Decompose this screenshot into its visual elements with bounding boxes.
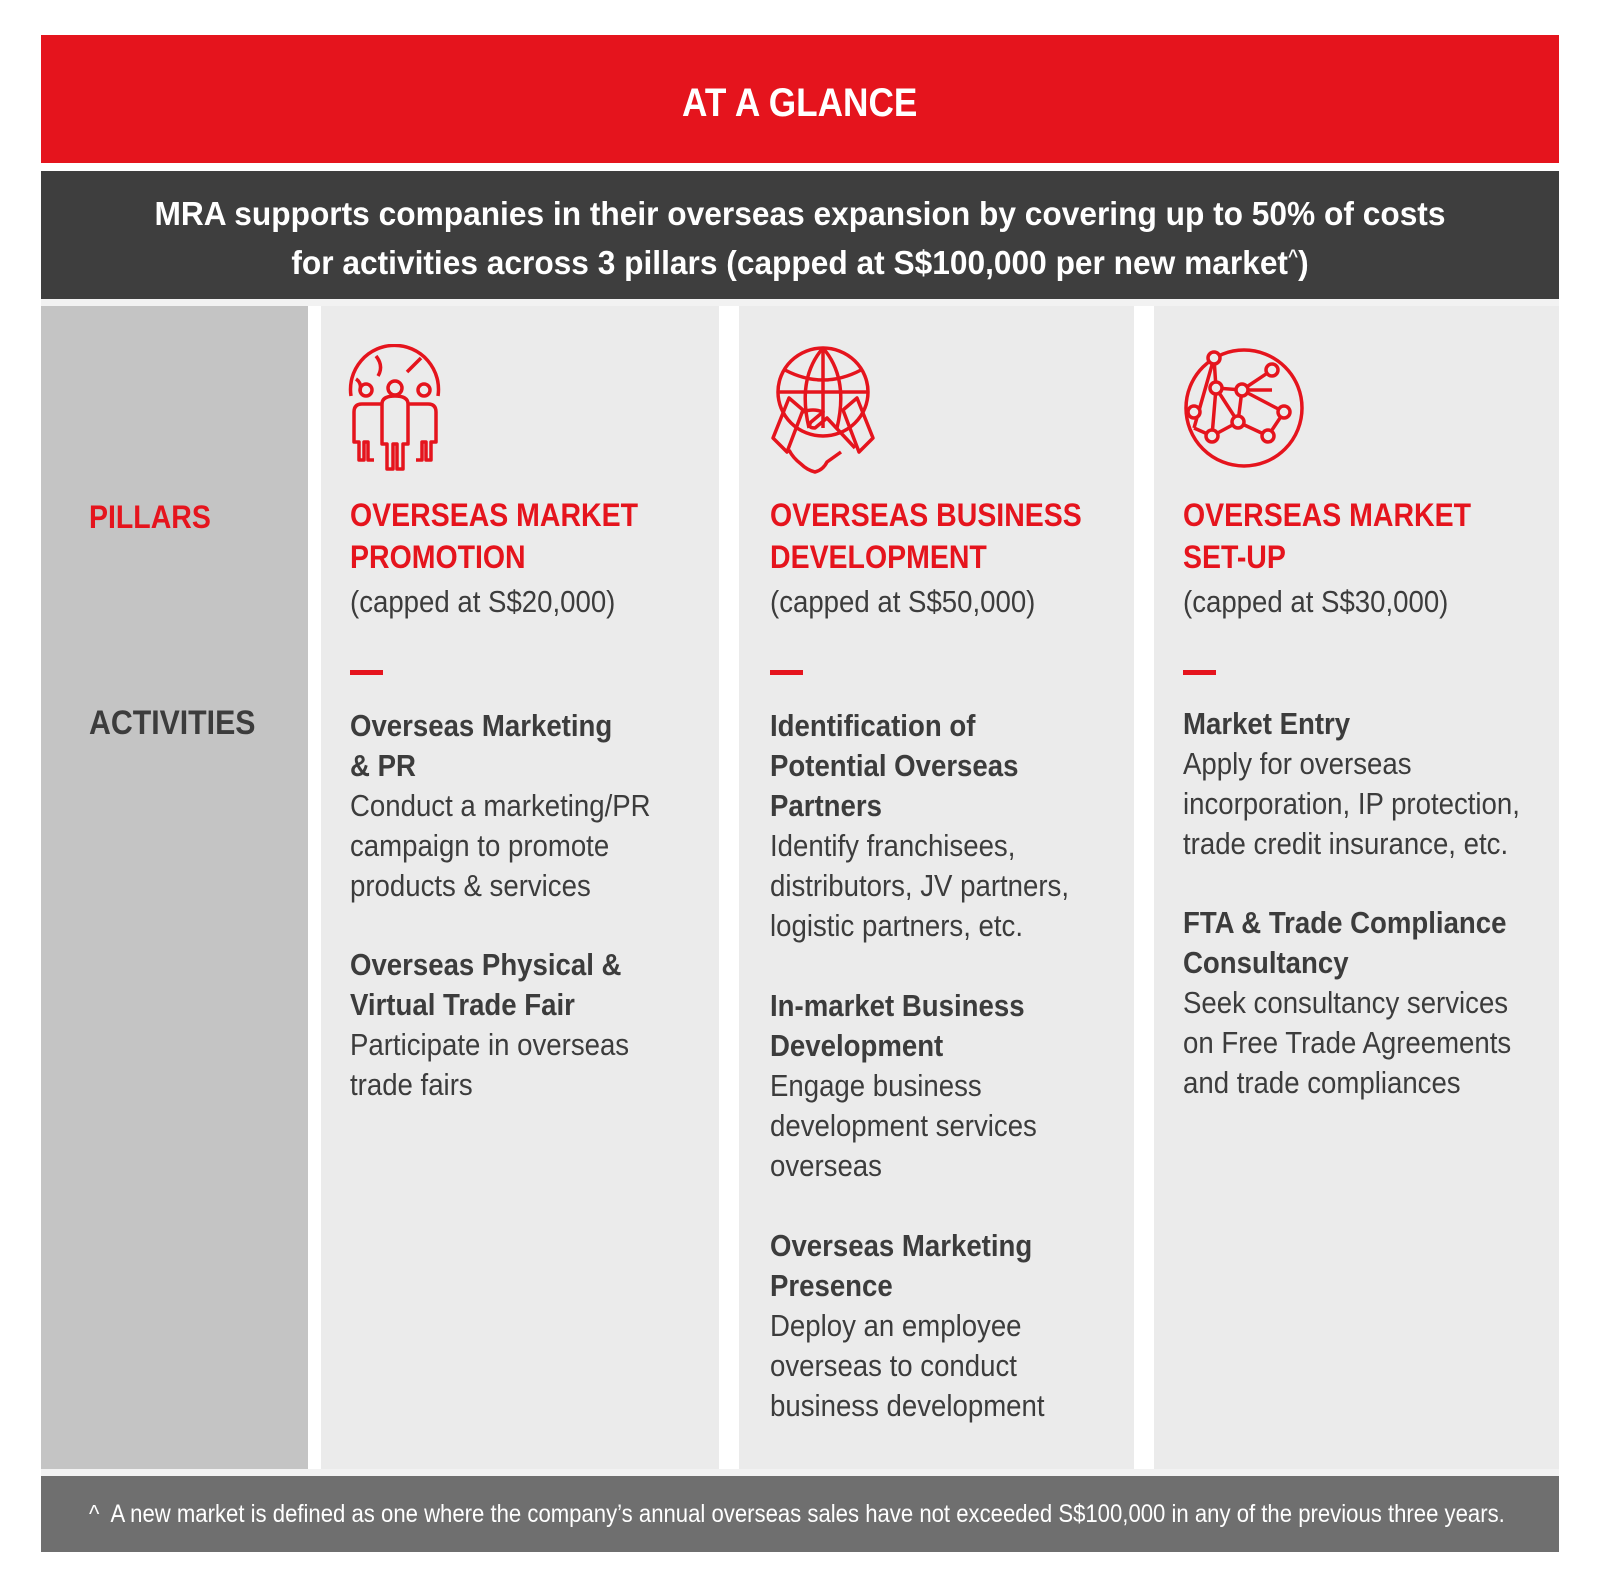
activity: partners: Identify franchisees, — [770, 828, 1015, 863]
activity: marketing & PR: & PR — [350, 748, 416, 783]
activity: market entry: incorporation, IP protection, — [1183, 786, 1520, 821]
activity: partners: Identification of — [770, 708, 975, 743]
activity: marketing presence: overseas to conduct — [770, 1348, 1017, 1383]
activity: partners: Partners — [770, 788, 882, 823]
pillar heading: OVERSEAS MARKET — [350, 497, 638, 533]
activity: fta consultancy: Seek consultancy services — [1183, 985, 1508, 1020]
activity: partners: Potential Overseas — [770, 748, 1018, 783]
activity: marketing presence: Presence — [770, 1268, 893, 1303]
activity: fta consultancy: FTA & Trade Compliance — [1183, 905, 1506, 940]
pillar heading — [1183, 497, 1471, 575]
activity: in-market bd: In-market Business — [770, 988, 1025, 1023]
activity: fta consultancy — [1183, 905, 1511, 1100]
activity: marketing & PR: campaign to promote — [350, 828, 609, 863]
activity: partners: logistic partners, etc. — [770, 908, 1023, 943]
activity: market entry: trade credit insurance, etc. — [1183, 826, 1508, 861]
pillar heading: SET-UP — [1183, 539, 1286, 575]
label: activities: ACTIVITIES — [89, 704, 255, 742]
activity: partners: distributors, JV partners, — [770, 868, 1069, 903]
title bar — [41, 35, 1559, 163]
activity: marketing & PR — [350, 708, 651, 903]
activity: marketing & PR: products & services — [350, 868, 591, 903]
pillar heading: OVERSEAS BUSINESS — [770, 497, 1082, 533]
activity: market entry: Market Entry — [1183, 706, 1350, 741]
cap amount: (capped at S$30,000) — [1183, 584, 1448, 619]
activity: in-market bd — [770, 988, 1037, 1183]
activity: marketing & PR: Overseas Marketing — [350, 708, 612, 743]
panel: overseas market promotion — [321, 306, 719, 1469]
cap amount: (capped at S$50,000) — [770, 584, 1035, 619]
activity: trade fair — [350, 947, 629, 1102]
activity: in-market bd: Development — [770, 1028, 943, 1063]
activity: market entry: Apply for overseas — [1183, 746, 1411, 781]
subtitle band: MRA supports companies in their overseas expansion by covering up to 50% of costs — [155, 195, 1445, 232]
subtitle band: for activities across 3 pillars (capped at S$100,000 per new market^) — [291, 244, 1309, 281]
pillar heading — [350, 497, 638, 575]
activity: fta consultancy: on Free Trade Agreements — [1183, 1025, 1511, 1060]
footnote — [41, 1476, 1559, 1552]
footnote: ^ A new market is defined as one where the company’s annual overseas sales have not exceeded S$100,000 in any of the previous three years. — [89, 1500, 1505, 1528]
pillar heading: OVERSEAS MARKET — [1183, 497, 1471, 533]
activity: in-market bd: development services — [770, 1108, 1037, 1143]
pillar heading — [770, 497, 1082, 575]
top strip background — [41, 299, 1559, 1476]
activity: fta consultancy: and trade compliances — [1183, 1065, 1461, 1100]
activity: marketing presence: Overseas Marketing — [770, 1228, 1032, 1263]
icon: globe handshake — [771, 346, 875, 474]
activity: trade fair: trade fairs — [350, 1067, 473, 1102]
cap amount: (capped at S$20,000) — [350, 584, 615, 619]
label: pillars: PILLARS — [89, 499, 211, 535]
panel: overseas market set-up — [1154, 306, 1559, 1469]
activity: fta consultancy: Consultancy — [1183, 945, 1349, 980]
activity: marketing presence: business development — [770, 1388, 1045, 1423]
activity: in-market bd: Engage business — [770, 1068, 982, 1103]
activity: market entry — [1183, 706, 1520, 861]
pillar heading: PROMOTION — [350, 539, 526, 575]
activity: marketing & PR: Conduct a marketing/PR — [350, 788, 651, 823]
activity: trade fair: Virtual Trade Fair — [350, 987, 575, 1022]
subtitle band — [41, 171, 1559, 299]
activity: marketing presence — [770, 1228, 1045, 1423]
activity: marketing presence: Deploy an employee — [770, 1308, 1022, 1343]
activity: trade fair: Participate in overseas — [350, 1027, 629, 1062]
icon: network globe — [1184, 348, 1304, 468]
activity: partners — [770, 708, 1069, 943]
activity: in-market bd: overseas — [770, 1148, 882, 1183]
activity: trade fair: Overseas Physical & — [350, 947, 621, 982]
row label column — [41, 306, 308, 1469]
title bar: AT A GLANCE — [682, 81, 918, 125]
pillar heading: DEVELOPMENT — [770, 539, 987, 575]
panel: overseas business development — [739, 306, 1134, 1469]
icon: people globe — [348, 344, 440, 471]
